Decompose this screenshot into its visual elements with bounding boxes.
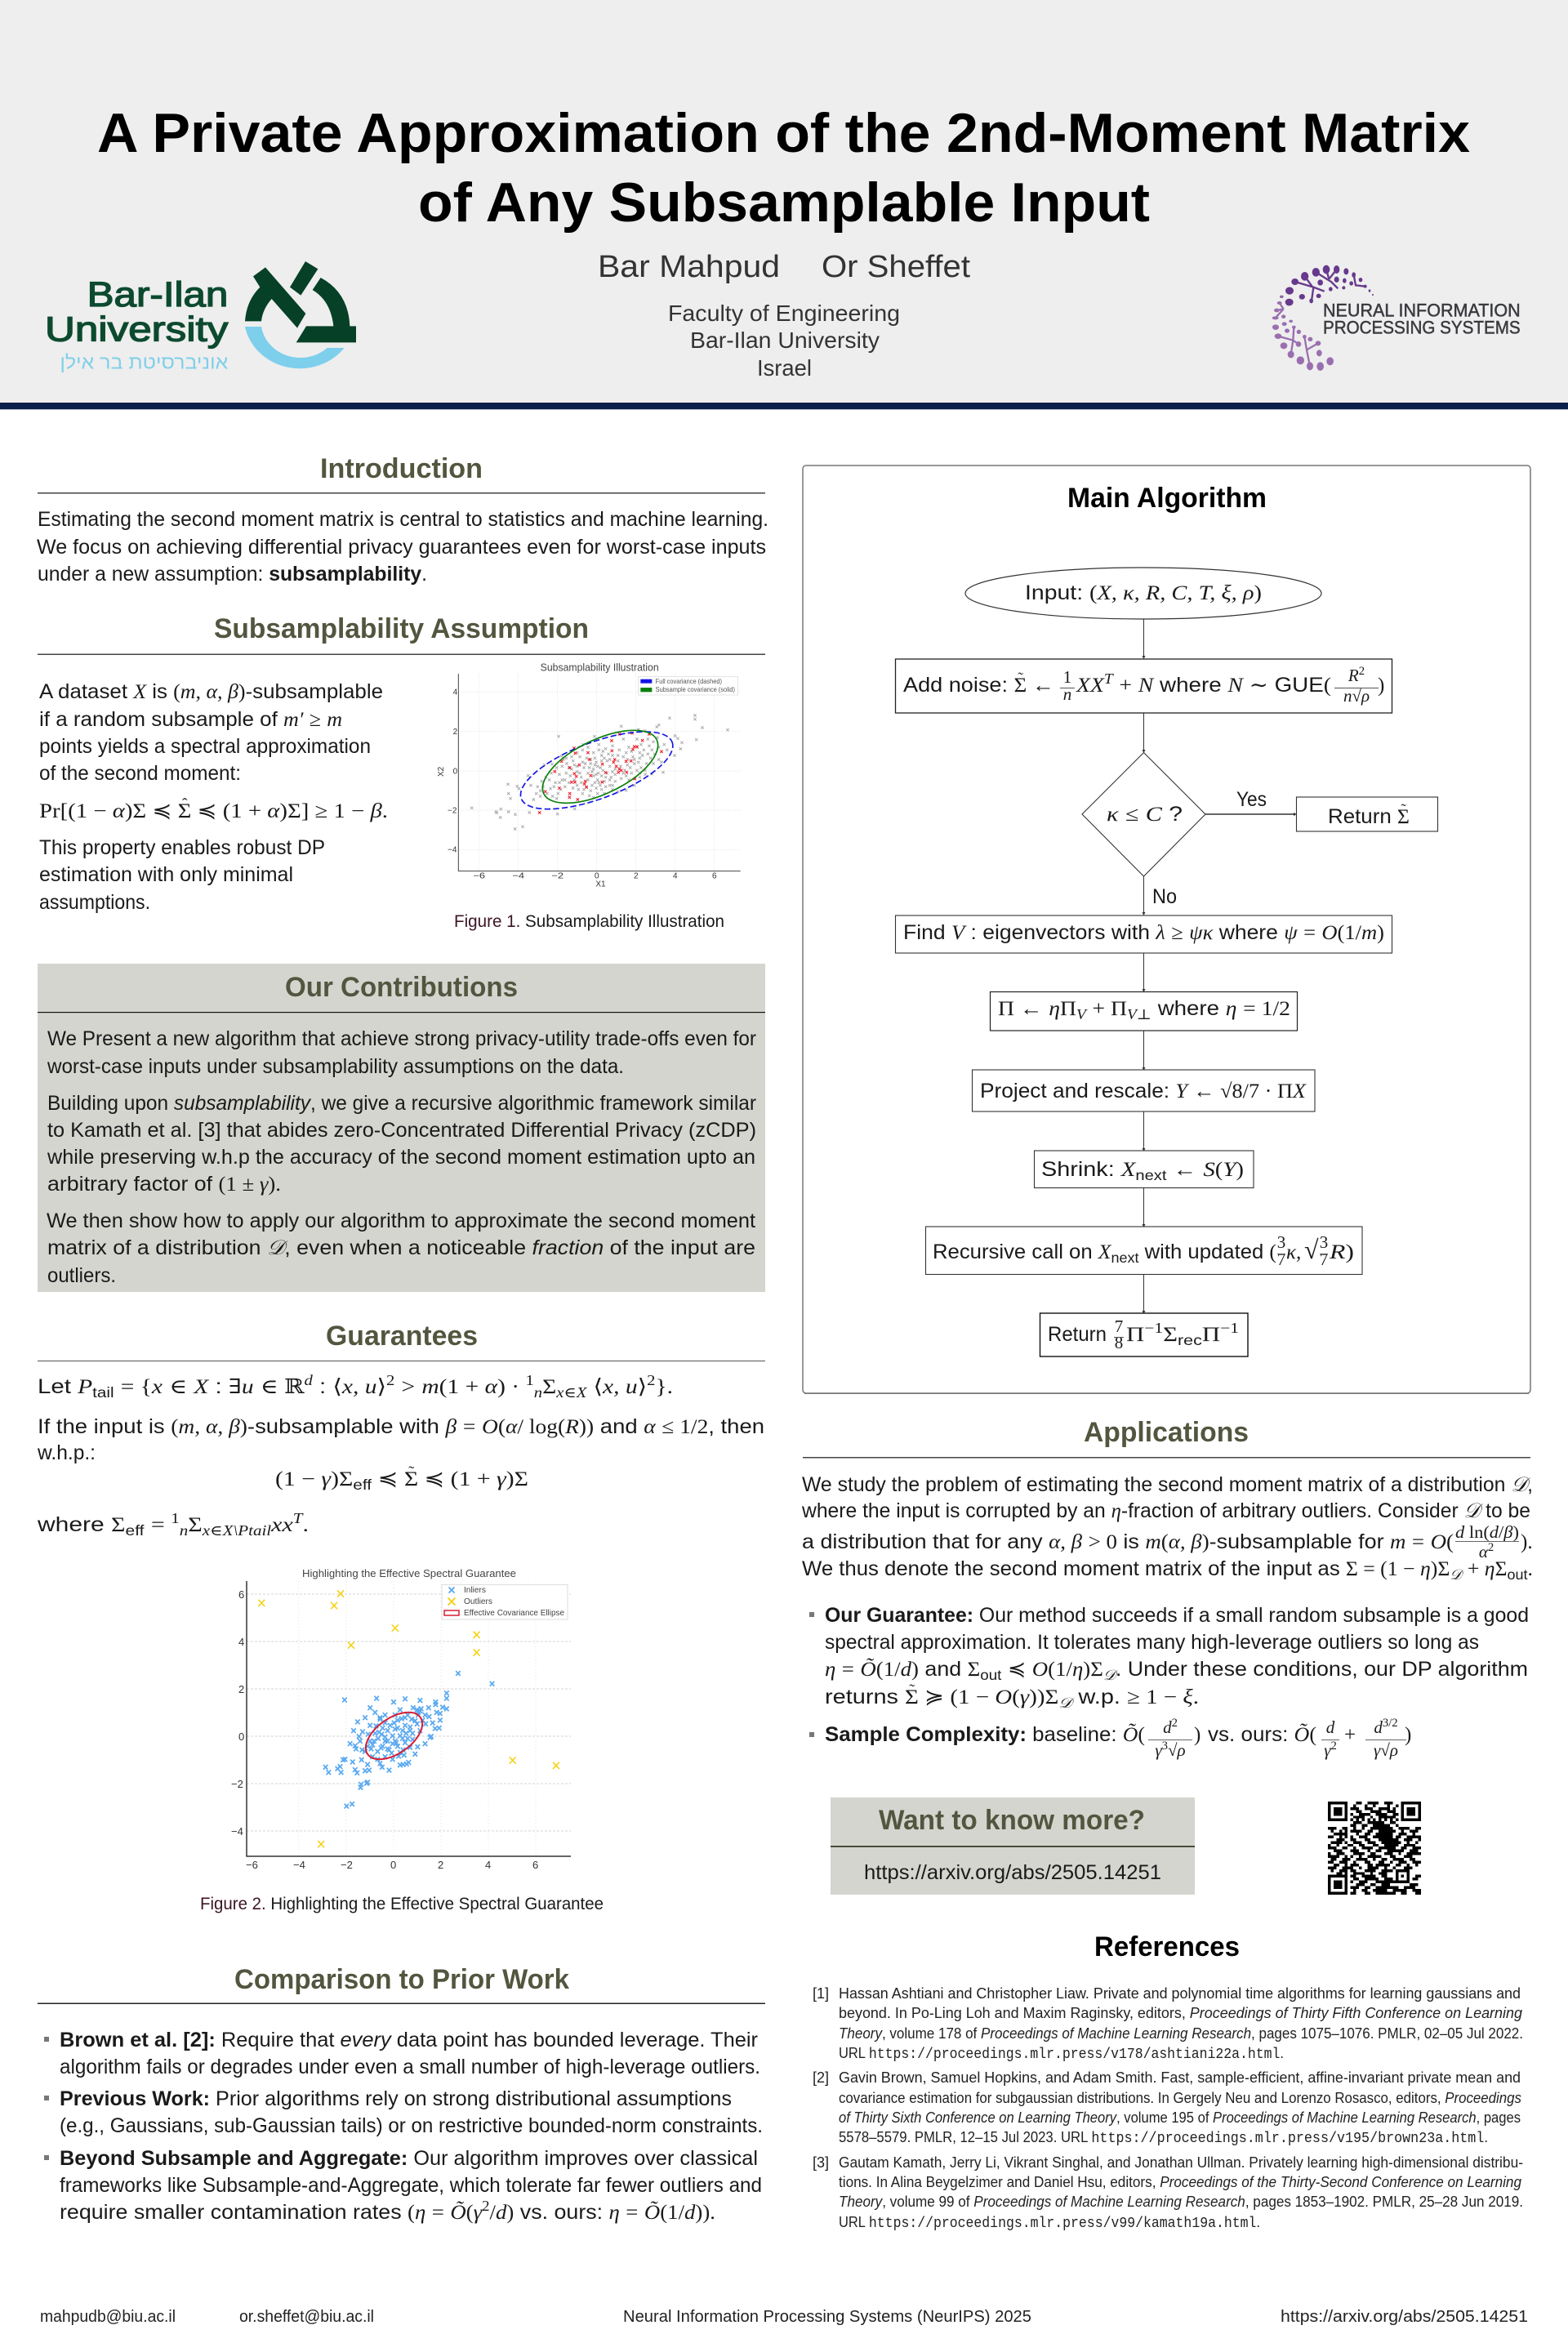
text block: contributions: arbitrary factor of (1 ± γ). xyxy=(47,1173,281,1196)
reference 2: Gavin Brown, Samuel Hopkins, and Adam Smith. Fast, sample-efficient, affine-invariant private mean and xyxy=(839,2069,1521,2086)
step: projection: Π ← ηΠV + ΠV⊥ where η = 1/2 xyxy=(998,997,1290,1022)
step: return noisy estimate xyxy=(1297,797,1437,831)
reference 3: Theory, volume 99 of Proceedings of Machine Learning Research, pages 1853–1902. PMLR, 25–28 Jun 2019. xyxy=(839,2194,1523,2210)
panel: subsamplability assumption xyxy=(38,613,765,931)
chart: effective spectral guarantee scatter: −6 xyxy=(246,1859,258,1871)
chart: subsamplability illustration scatter: 2 xyxy=(634,872,639,881)
step: find eigenvectors xyxy=(895,915,1392,953)
step: recursive call: 3 xyxy=(1320,1232,1328,1252)
heading: Guarantees: Guarantees xyxy=(326,1321,478,1352)
header band xyxy=(0,0,1568,410)
reference 1: URL https://proceedings.mlr.press/v178/ashtiani22a.html. xyxy=(839,2045,1284,2063)
list: application bullets: d xyxy=(1326,1717,1335,1737)
step: return result: 8 xyxy=(1115,1333,1123,1352)
reference 1: Hassan Ashtiani and Christopher Liaw. Private and polynomial time algorithms for learning gaussians and xyxy=(839,1985,1521,2002)
list: comparison bullets: Beyond Subsample and Aggregate: Our algorithm improves over classical xyxy=(60,2147,758,2170)
chart: subsamplability illustration scatter: 4 xyxy=(453,688,458,697)
heading: Subsamplability Assumption: Subsamplability Assumption xyxy=(214,613,589,644)
heading: Applications: Applications xyxy=(1084,1417,1249,1448)
chart: effective spectral guarantee scatter: 4 xyxy=(485,1859,491,1871)
logo: Bar-Ilan University: University xyxy=(45,310,229,349)
step: shrink xyxy=(1034,1151,1254,1187)
step: input: Input: (X, κ, R, C, T, ξ, ρ ) xyxy=(1025,581,1262,604)
text block: definition: points yields a spectral approximation xyxy=(39,735,371,758)
text block: introduction body xyxy=(37,508,768,586)
list: application bullets: γ2 xyxy=(1324,1740,1337,1760)
list: comparison bullets: require smaller contamination rates (η = Õ(γ2/d) vs. ours: η = Õ(1/d)). xyxy=(60,2198,715,2224)
reference 3: [3] xyxy=(813,2154,829,2171)
chart: effective spectral guarantee scatter: 6 xyxy=(238,1588,244,1601)
authors: Bar Mahpud xyxy=(598,250,780,284)
footer: Neural Information Processing Systems (NeurIPS) 2025 xyxy=(623,2308,1031,2326)
text block: contributions: outliers. xyxy=(47,1264,116,1287)
chart: subsamplability illustration scatter: Subsamplability Illustration xyxy=(541,662,659,673)
logo: Neural Information Processing Systems: NEURAL INFORMATION xyxy=(1323,300,1521,320)
list: comparison bullets: frameworks like Subsample-and-Aggregate, which tolerate far fewer outliers and xyxy=(60,2174,762,2197)
authors: Or Sheffet xyxy=(822,250,970,284)
chart: effective spectral guarantee scatter: 2 xyxy=(238,1683,244,1695)
affiliation xyxy=(668,301,900,381)
authors xyxy=(598,250,970,284)
step: add noise xyxy=(895,659,1392,713)
logo: Bar-Ilan University: אוניברסיטת בר אילן xyxy=(60,352,229,373)
chart: subsamplability illustration scatter: Full covariance (dashed) xyxy=(656,678,722,685)
reference 2: [2] xyxy=(813,2069,829,2086)
text block: guarantees statement: If the input is (m, α, β )-subsamplable with β = O(α/ log(R)) and α ≤ 1/2, then xyxy=(38,1415,764,1438)
logo: Bar-Ilan University: Bar-Ilan xyxy=(87,275,228,314)
text block: contributions: Building upon subsamplability, we give a recursive algorithmic framework similar xyxy=(47,1092,756,1115)
logo: Neural Information Processing Systems xyxy=(1272,265,1521,371)
text block: contributions: matrix of a distribution 𝒟, even when a noticeable fraction of the input are xyxy=(47,1236,755,1259)
reference 2 xyxy=(813,2069,1521,2147)
text block: guarantees statement: where Σeff = 1nΣx∈X\Ptail xx T. xyxy=(37,1510,309,1539)
text block: contributions: worst-case inputs under subsamplability assumptions on the data. xyxy=(47,1055,624,1078)
step: decision: κ ≤ C ? xyxy=(1107,803,1183,826)
affiliation: Israel xyxy=(757,355,812,381)
text block: guarantees statement: Let Ptail = {x ∈ X : ∃u ∈ ℝ d : ⟨x, u ⟩2 > m(1 + α) · 1nΣx∈X ⟨x, u ⟩2}. xyxy=(38,1372,673,1401)
reference 2: of Thirty Sixth Conference on Learning Theory, volume 195 of Proceedings of Machine Learning Research, pages xyxy=(839,2109,1521,2126)
text block: definition: assumptions. xyxy=(39,891,150,914)
chart: effective spectral guarantee scatter: 6 xyxy=(532,1859,538,1871)
title: A Private Approximation of the 2nd-Moment Matrix xyxy=(97,102,1470,164)
reference 3 xyxy=(813,2154,1523,2232)
icon: QR code xyxy=(1328,1803,1421,1893)
chart: subsamplability illustration scatter: 2 xyxy=(453,728,458,737)
chart: subsamplability illustration scatter: X1 xyxy=(595,880,606,889)
step: add noise: R2 xyxy=(1348,665,1365,685)
text block: contributions xyxy=(47,1027,756,1287)
affiliation: Bar-Ilan University xyxy=(690,327,880,353)
heading: References: References xyxy=(1094,1931,1240,1962)
step: recursive call: √ xyxy=(1304,1235,1319,1264)
text block: guarantees statement: w.h.p.: xyxy=(37,1441,96,1464)
panel: our contributions xyxy=(38,964,765,1292)
step: return result: Return xyxy=(1048,1323,1107,1346)
list: application bullets: γ√ρ xyxy=(1374,1740,1398,1760)
caption: figure 1: Figure 1. Subsamplability Illustration xyxy=(454,912,724,931)
chart: subsamplability illustration scatter: 0 xyxy=(595,872,599,881)
label: no: No xyxy=(1152,885,1177,908)
reference 3: Gautam Kamath, Jerry Li, Vikrant Singhal, and Jonathan Ullman. Privately learning high-dimensional distribu- xyxy=(839,2154,1523,2171)
footer: https://arxiv.org/abs/2505.14251 xyxy=(1281,2308,1528,2326)
list: application bullets: d3/2 xyxy=(1374,1717,1398,1737)
text block: applications intro: α2 xyxy=(1479,1541,1494,1561)
list: application bullets: γ3√ρ xyxy=(1155,1740,1186,1760)
chart: subsamplability illustration scatter: −4 xyxy=(512,872,525,881)
text block: guarantees statement xyxy=(37,1372,764,1539)
chart: subsamplability illustration scatter: 6 xyxy=(712,872,717,881)
text block: contributions: while preserving w.h.p the accuracy of the second moment estimation upto an xyxy=(47,1146,755,1169)
step: add noise: n xyxy=(1063,684,1071,704)
chart: subsamplability illustration scatter: 4 xyxy=(673,872,678,881)
text block: contributions: We Present a new algorithm that achieve strong privacy-utility trade-offs even for xyxy=(47,1027,756,1050)
text block: applications intro: a distribution that for any α, β > 0 is m(α, β)-subsamplable for m = O( xyxy=(802,1530,1454,1553)
text block: definition: if a random subsample of m′ ≥ m xyxy=(39,708,342,731)
list: comparison bullets: Previous Work: Prior algorithms rely on strong distributional assumptions xyxy=(60,2087,732,2110)
reference 1: Theory, volume 178 of Proceedings of Machine Learning Research, pages 1075–1076. PMLR, 02–05 Jul 2022. xyxy=(839,2025,1523,2042)
text block: contributions: We then show how to apply our algorithm to approximate the second moment xyxy=(47,1209,755,1232)
step: find eigenvectors: Find V : eigenvectors with λ ≥ ψκ where ψ = O(1/m) xyxy=(903,921,1384,944)
footer: mahpudb@biu.ac.il xyxy=(40,2308,176,2326)
step: recursive call: R) xyxy=(1329,1241,1354,1263)
heading: Introduction: Introduction xyxy=(320,453,483,484)
text block: applications intro: We thus denote the second moment matrix of the input as Σ = (1 − η)Σ𝒟 + ηΣout. xyxy=(802,1557,1533,1583)
text block: introduction body: under a new assumption: subsamplability. xyxy=(38,563,427,586)
chart: effective spectral guarantee scatter: −2 xyxy=(341,1859,353,1871)
chart: effective spectral guarantee scatter: Inliers xyxy=(464,1586,486,1595)
chart: subsamplability illustration scatter: 0 xyxy=(453,767,458,776)
list: application bullets: Sample Complexity: baseline: Õ( xyxy=(825,1723,1145,1746)
chart: effective spectral guarantee scatter: −4 xyxy=(293,1859,305,1871)
step: recursive call: 7 xyxy=(1320,1250,1328,1269)
chart: effective spectral guarantee scatter: Highlighting the Effective Spectral Guarantee xyxy=(302,1567,516,1579)
footer: or.sheffet@biu.ac.il xyxy=(239,2308,374,2326)
arrows xyxy=(1143,619,1295,1313)
heading: Want to know more?: Want to know more? xyxy=(879,1805,1145,1836)
step: input xyxy=(965,568,1321,619)
text block: applications intro: ). xyxy=(1521,1531,1533,1553)
list: application bullets: vs. ours: Õ( xyxy=(1208,1723,1316,1746)
chart: subsamplability illustration scatter: −4 xyxy=(448,846,457,855)
chart: effective spectral guarantee scatter: 4 xyxy=(238,1636,244,1648)
reference 3: URL https://proceedings.mlr.press/v99/kamath19a.html. xyxy=(839,2214,1260,2232)
step: project and rescale xyxy=(972,1070,1315,1111)
list: comparison bullets xyxy=(44,2029,763,2224)
step: add noise: ) xyxy=(1378,675,1384,697)
chart: subsamplability illustration scatter: −2 xyxy=(551,872,564,881)
step: return result xyxy=(1040,1313,1248,1356)
text block: definition: A dataset X is (m, α, β)-subsamplable xyxy=(39,680,383,703)
text block: introduction body: Estimating the second moment matrix is central to statistics and machine learning. xyxy=(38,508,768,531)
chart: effective spectral guarantee scatter: Effective Covariance Ellipse xyxy=(464,1609,564,1618)
text block: definition: estimation with only minimal xyxy=(39,863,293,886)
chart: effective spectral guarantee scatter: 2 xyxy=(438,1859,443,1871)
text block: definition: Pr[(1 − α)Σ ≼ Σˆ ≼ (1 + α)Σ] ≥ 1 − β. xyxy=(39,795,388,822)
step: recursive call: Recursive call on Xnext with updated ( xyxy=(933,1241,1276,1266)
chart: effective spectral guarantee scatter: −4 xyxy=(231,1825,243,1838)
chart: subsamplability illustration scatter: X2 xyxy=(437,766,446,777)
step: add noise: n√ρ xyxy=(1343,686,1370,706)
step: return result: 7 xyxy=(1115,1316,1123,1336)
logo: Neural Information Processing Systems: PROCESSING SYSTEMS xyxy=(1323,318,1521,338)
reference 2: 5578–5579. PMLR, 12–15 Jul 2023. URL https://proceedings.mlr.press/v195/brown23a.html. xyxy=(839,2129,1488,2147)
panel: comparison to prior work xyxy=(38,1964,765,2224)
text block: definition: of the second moment: xyxy=(39,762,241,785)
list: application bullets: spectral approximation. It tolerates many high-leverage outliers so long as xyxy=(825,1631,1479,1654)
panel: introduction xyxy=(37,453,768,586)
step: recursive call: 3 xyxy=(1277,1232,1285,1252)
heading: Our Contributions: Our Contributions xyxy=(285,972,518,1003)
text block: contributions: to Kamath et al. [3] that abides zero-Concentrated Differential Privacy (zCDP) xyxy=(47,1119,756,1142)
heading: Comparison to Prior Work: Comparison to Prior Work xyxy=(234,1964,569,1995)
affiliation: Faculty of Engineering xyxy=(668,301,900,326)
logo: Bar-Ilan University xyxy=(45,261,356,373)
chart: subsamplability illustration scatter: Subsample covariance (solid) xyxy=(656,686,735,693)
chart: effective spectral guarantee scatter: 0 xyxy=(390,1859,396,1871)
list: application bullets xyxy=(809,1604,1529,1760)
reference 3: tions. In Alina Beygelzimer and Daniel Hsu, editors, Proceedings of the Thirty-Second Conference on Learning xyxy=(839,2174,1521,2190)
list: application bullets: returns Σ˜ ≽ (1 − O(γ))Σ 𝒟 w.p. ≥ 1 − ξ. xyxy=(825,1682,1199,1711)
text block: definition xyxy=(39,680,388,914)
flowchart: algorithm steps xyxy=(895,568,1437,1356)
step: project and rescale: Project and rescale: Y ← √8/7 · ΠX xyxy=(980,1080,1307,1102)
step: add noise: Add noise: Σ˜ ← xyxy=(903,670,1054,697)
reference 1: beyond. In Po-Ling Loh and Maxim Raginsky, editors, Proceedings of Thirty Fifth Conference on Learning xyxy=(839,2005,1522,2021)
step: recursive call: 7 xyxy=(1277,1250,1285,1269)
panel: guarantees xyxy=(37,1321,765,1913)
heading: Main Algorithm: Main Algorithm xyxy=(1067,483,1267,514)
list: comparison bullets: (e.g., Gaussians, sub-Gaussian tails) or on restrictive bounded-norm constraints. xyxy=(60,2114,763,2137)
reference 1 xyxy=(813,1985,1523,2063)
chart: effective spectral guarantee scatter: Outliers xyxy=(464,1597,492,1606)
text block: definition: This property enables robust DP xyxy=(39,836,325,859)
reference 1: [1] xyxy=(813,1985,829,2002)
callout: want to know more xyxy=(831,1797,1195,1895)
label: yes: Yes xyxy=(1236,788,1267,811)
step: decision xyxy=(1082,753,1205,876)
title xyxy=(97,102,1470,234)
step: add noise: 1 xyxy=(1063,667,1071,687)
text block: introduction body: We focus on achieving differential privacy guarantees even for worst-case inputs xyxy=(37,536,766,559)
list: application bullets: Our Guarantee: Our method succeeds if a small random subsample is a good xyxy=(825,1604,1529,1627)
chart: subsamplability illustration scatter xyxy=(437,662,741,889)
step: shrink: Shrink: Xnext ← S(Y) xyxy=(1041,1158,1244,1183)
text block: applications intro: d ln(d/β) xyxy=(1455,1522,1519,1542)
title: of Any Subsamplable Input xyxy=(418,172,1150,234)
panel: applications xyxy=(801,1417,1533,1760)
text block: guarantees statement: (1 − γ)Σeff ≼ Σ˜ ≼ (1 + γ)Σ xyxy=(275,1463,528,1493)
list: application bullets: ) xyxy=(1194,1724,1200,1746)
list: application bullets: η = Õ(1/d) and Σout ≼ O(1/η)Σ𝒟. Under these conditions, our DP algorithm xyxy=(825,1658,1528,1683)
text block: applications intro: where the input is corrupted by an η-fraction of arbitrary outliers. Consider 𝒟 to be xyxy=(801,1499,1530,1522)
text block: applications intro: We study the problem of estimating the second moment matrix of a distribution 𝒟, xyxy=(802,1473,1533,1496)
link: arXiv URL: https://arxiv.org/abs/2505.14251 xyxy=(864,1861,1161,1884)
panel: main algorithm xyxy=(803,466,1530,1394)
step: add noise: XXT + N where N ∼ GUE ( xyxy=(1076,670,1331,697)
chart: effective spectral guarantee scatter: −2 xyxy=(231,1778,243,1790)
step: projection xyxy=(990,991,1297,1031)
step: recursive call: κ, xyxy=(1286,1241,1301,1263)
list: application bullets: ) xyxy=(1405,1724,1411,1746)
chart: effective spectral guarantee scatter: 0 xyxy=(238,1731,244,1743)
footer xyxy=(40,2308,1528,2326)
step: recursive call xyxy=(926,1227,1362,1274)
list: application bullets: d2 xyxy=(1163,1717,1178,1737)
text block: applications intro xyxy=(801,1473,1533,1583)
list: application bullets: + xyxy=(1344,1724,1356,1746)
reference 2: covariance estimation for subgaussian distributions. In Gergely Neu and Lorenzo Rosasco, editors, Proceedings xyxy=(839,2090,1521,2106)
list: comparison bullets: algorithm fails or degrades under even a small number of high-leverage outliers. xyxy=(60,2056,760,2078)
panel: references xyxy=(813,1931,1523,2232)
chart: subsamplability illustration scatter: −6 xyxy=(473,872,486,881)
chart: effective spectral guarantee scatter xyxy=(231,1567,571,1871)
step: return result: Π−1ΣrecΠ−1 xyxy=(1126,1320,1239,1348)
chart: subsamplability illustration scatter: −2 xyxy=(448,806,457,815)
list: comparison bullets: Brown et al. [2]: Require that every data point has bounded leverage. Their xyxy=(60,2029,758,2051)
step: return noisy estimate: Return Σ˜ xyxy=(1328,801,1410,828)
caption: figure 2: Figure 2. Highlighting the Effective Spectral Guarantee xyxy=(200,1895,604,1913)
